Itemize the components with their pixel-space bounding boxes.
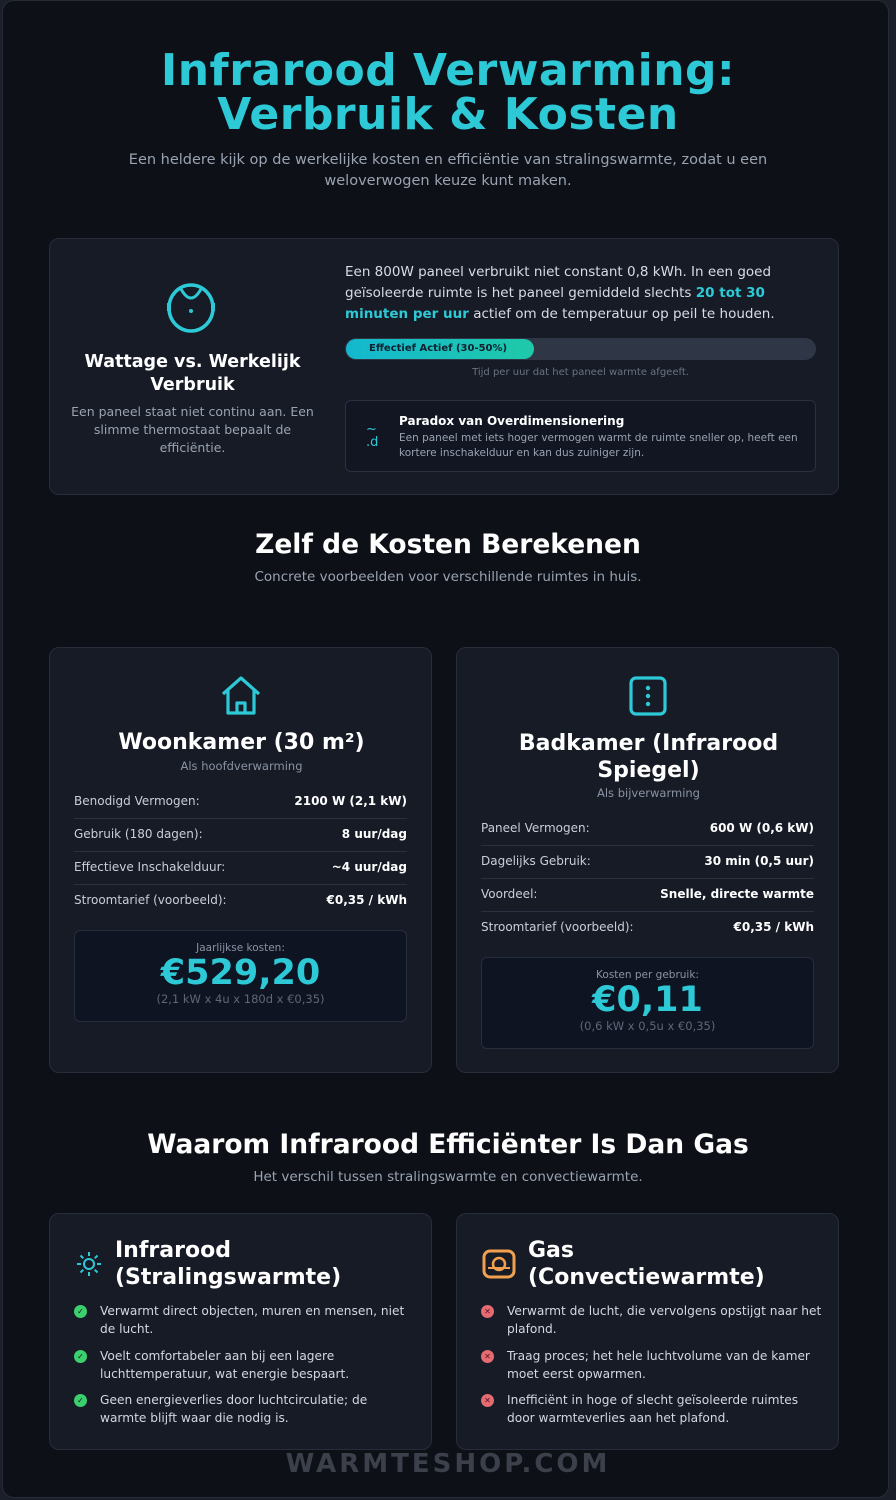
table rows (481, 813, 814, 846)
heading: zelf berekenen: Zelf de Kosten Berekenen (255, 529, 641, 560)
panel: infrarood: ✓ (77, 1352, 84, 1361)
panel: infrarood: (Stralingswarmte) (115, 1265, 341, 1290)
panel: woonkamer (49, 647, 432, 1073)
panel: gas: Inefficiënt in hoge of slecht geïsoleerde ruimtes door warmteverlies aan het plafond. (507, 1393, 798, 1425)
icon: wave (366, 422, 378, 450)
cost box: (0,6 kW x 0,5u x €0,35) (580, 1019, 715, 1033)
title: Infrarood Verwarming: (161, 45, 735, 96)
panel: badkamer: Voordeel: (481, 887, 537, 901)
callout: paradox: Een paneel met iets hoger vermogen warmt de ruimte sneller op, heeft een kortere inschakelduur en kan dus zuiniger zijn. (399, 432, 798, 459)
icon: wave: .d (366, 435, 378, 450)
panel: badkamer: Badkamer (Infrarood (519, 731, 778, 756)
subheading: Het verschil tussen stralingswarmte en convectiewarmte. (253, 1169, 643, 1185)
panel: woonkamer: Gebruik (180 dagen): (74, 827, 203, 841)
bullets: ✓ (77, 1307, 84, 1316)
panel: badkamer: Als bijverwarming (597, 786, 700, 800)
cost box (481, 957, 814, 1049)
panel: badkamer (456, 647, 839, 1073)
panel: badkamer: Snelle, directe warmte (660, 887, 814, 901)
icon: gas burner (482, 1250, 516, 1278)
cost box: Kosten per gebruik: (596, 969, 699, 981)
panel: gas (456, 1213, 839, 1450)
panel: wattage vs verbruik (49, 238, 839, 495)
panel: badkamer: Stroomtarief (voorbeeld): (481, 920, 634, 934)
panel: infrarood: Geen energieverlies door luchtcirculatie; de warmte blijft waar die nodig is. (100, 1393, 367, 1425)
table rows: Paneel Vermogen: (481, 821, 590, 835)
panel: infrarood: Infrarood (115, 1238, 231, 1263)
panel: gas: Gas (528, 1238, 574, 1263)
icon: house (222, 676, 260, 715)
panel: woonkamer: Woonkamer (30 m²) (118, 730, 365, 755)
panel: woonkamer: Stroomtarief (voorbeeld): (74, 893, 227, 907)
heading: Wattage vs. Werkelijk Verbruik (85, 352, 300, 395)
bullets: Verwarmt direct objecten, muren en mensen, niet de lucht. (100, 1304, 404, 1336)
subtitle: Een heldere kijk op de werkelijke kosten en efficiëntie van stralingswarmte, zodat u een weloverwogen keuze kunt maken. (129, 152, 767, 189)
panel: badkamer: €0,35 / kWh (734, 920, 814, 934)
title: Verbruik & Kosten (217, 89, 679, 140)
table rows: 600 W (0,6 kW) (710, 821, 814, 835)
panel: infrarood: Voelt comfortabeler aan bij een lagere luchttemperatuur, wat energie bespaart. (100, 1349, 349, 1381)
panel: badkamer: 30 min (0,5 uur) (704, 854, 814, 868)
panel: infrarood (49, 1213, 432, 1450)
table rows: Benodigd Vermogen: (74, 794, 200, 808)
panel: gas: (Convectiewarmte) (528, 1265, 765, 1290)
panel: woonkamer: Effectieve Inschakelduur: (74, 860, 225, 874)
callout: paradox: Paradox van Overdimensionering (399, 414, 624, 428)
panel: infrarood: ✓ (77, 1396, 84, 1405)
panel: woonkamer: €0,35 / kWh (327, 893, 407, 907)
cost box: €529,20 (161, 953, 320, 993)
panel: gas: ✕ (484, 1396, 491, 1405)
cost box: Jaarlijkse kosten: (196, 942, 285, 954)
icon: sun (77, 1252, 101, 1276)
bullets: Verwarmt de lucht, die vervolgens opstijgt naar het plafond. (507, 1304, 821, 1336)
panel: gas: ✕ (484, 1352, 491, 1361)
text block: Een 800W paneel verbruikt niet constant 0,8 kWh. In een goed geïsoleerde ruimte is het paneel gemiddeld slechts 20 tot 30 minuten per uur actief om de temperatuur op peil te houden. (345, 264, 775, 322)
title (161, 45, 735, 140)
caption: Tijd per uur dat het paneel warmte afgeeft. (472, 367, 689, 378)
icon: mirror (629, 676, 667, 716)
progress bar: Effectief Actief (30-50%) (369, 343, 507, 354)
panel: gas: Traag proces; het hele luchtvolume van de kamer moet eerst opwarmen. (507, 1349, 810, 1381)
panel: woonkamer: Als hoofdverwarming (180, 759, 302, 773)
cost box: (2,1 kW x 4u x 180d x €0,35) (156, 992, 325, 1006)
panel: badkamer: Dagelijks Gebruik: (481, 854, 591, 868)
panel: badkamer: Spiegel) (597, 758, 700, 783)
cost box: €0,11 (592, 980, 703, 1020)
cost box (74, 930, 407, 1022)
subheading: Concrete voorbeelden voor verschillende ruimtes in huis. (254, 569, 642, 585)
progress bar (345, 338, 816, 360)
bullets: ✕ (484, 1307, 491, 1316)
icon: wave: ~ (366, 422, 377, 437)
panel: woonkamer: 8 uur/dag (342, 827, 407, 841)
description: Een paneel staat niet continu aan. Een slimme thermostaat bepaalt de efficiëntie. (71, 404, 314, 455)
icon: thermostat (167, 283, 215, 333)
callout: paradox (345, 400, 816, 472)
table rows: 2100 W (2,1 kW) (294, 794, 407, 808)
footer watermark: WARMTESHOP.COM (286, 1449, 610, 1479)
heading: waarom: Waarom Infrarood Efficiënter Is Dan Gas (147, 1129, 749, 1160)
panel: woonkamer: ~4 uur/dag (332, 860, 407, 874)
table rows (74, 786, 407, 819)
